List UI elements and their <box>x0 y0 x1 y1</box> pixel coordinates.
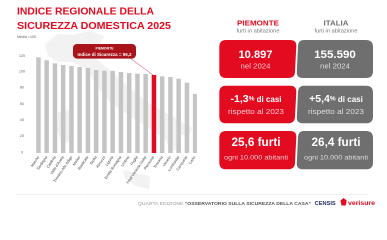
panel: Piemonte variazione: di casi <box>254 95 282 104</box>
callout: Piemonte index: Indice di Sicurezza = 96,2 <box>78 52 132 57</box>
region labels: Friuli Venezia Giulia <box>126 155 148 185</box>
region labels: Basilicata <box>77 155 90 171</box>
panel: Italia variazione: di casi <box>336 95 363 104</box>
panel: Italia furti per abitanti: 26,4 furti <box>312 137 360 149</box>
region labels: Piemonte <box>143 155 155 170</box>
panel: Italia 2024: nel 2024 <box>320 63 350 70</box>
y axis labels <box>19 54 25 154</box>
y axis labels: 120 <box>19 54 25 58</box>
panel: Piemonte furti per abitanti: 25,6 furti <box>232 137 280 149</box>
panel: Piemonte variazione <box>219 86 296 123</box>
region labels: Umbria <box>120 155 131 167</box>
panel: Italia furti per abitanti <box>297 131 373 169</box>
heading: Piemonte: PIEMONTE <box>237 19 279 28</box>
region labels: Campania <box>176 155 189 171</box>
heading: Piemonte <box>236 19 280 34</box>
region labels: Trentino Alto Adige <box>53 155 73 183</box>
y axis labels: 20 <box>20 134 24 138</box>
callout: Piemonte index <box>73 44 153 75</box>
region labels: Sicilia <box>89 155 98 166</box>
panel: Piemonte variazione: -1,3 <box>230 93 249 105</box>
heading: Piemonte: furti in abitazione <box>236 28 280 34</box>
panel: Italia furti per abitanti: ogni 10.000 abitanti <box>304 154 368 162</box>
region labels: Puglia <box>130 155 139 166</box>
panel: Piemonte variazione: rispetto al 2023 <box>228 109 284 116</box>
region labels: Toscana <box>153 155 164 169</box>
logo: Verisure: verisure <box>348 201 376 207</box>
title: INDICE REGIONALE DELLA <box>17 6 154 18</box>
panel: Italia variazione <box>297 86 373 123</box>
region labels: Valle d'Aosta <box>50 155 65 175</box>
panel: Piemonte furti per abitanti: ogni 10.000 abitanti <box>224 154 288 162</box>
panel: Italia variazione: rispetto al 2023 <box>308 109 364 116</box>
heading: Italia: ITALIA <box>324 19 349 28</box>
region labels <box>30 155 196 185</box>
title: SICUREZZA DOMESTICA 2025 <box>17 20 171 32</box>
background map of Italy <box>45 31 192 189</box>
callout: Piemonte index: PIEMONTE <box>96 47 114 51</box>
region labels: Lombardia <box>167 155 181 172</box>
region labels: Emilia Romagna <box>104 155 123 180</box>
region labels: Liguria <box>105 155 115 167</box>
region labels: Lazio <box>188 155 196 165</box>
title <box>17 6 171 32</box>
panel: Piemonte 2024 <box>219 40 296 78</box>
y axis labels: 100 <box>19 70 25 74</box>
Piemonte bar <box>152 75 156 153</box>
panel: Italia 2024: 155.590 <box>314 49 356 61</box>
region labels: Veneto <box>162 155 172 167</box>
logo: Censis: CENSIS <box>315 201 336 207</box>
panel: Italia variazione: % <box>330 95 336 102</box>
axis caption: Media =100 <box>17 35 36 39</box>
footer text: QUARTA EDIZIONE “OSSERVATORIO SULLA SICUREZZA DELLA CASA” <box>138 201 311 206</box>
logo: Verisure <box>340 198 376 207</box>
panel: Piemonte variazione: % <box>249 95 255 102</box>
heading: Italia: furti in abitazione <box>314 28 358 34</box>
heading: Italia <box>314 19 358 34</box>
region labels: Molise <box>72 155 81 166</box>
region labels: Marche <box>30 155 40 168</box>
panel: Italia variazione: +5,4 <box>309 93 330 105</box>
y axis labels: 60 <box>20 102 24 106</box>
panel: Piemonte 2024: nel 2024 <box>240 63 271 70</box>
panel: Piemonte furti per abitanti <box>219 131 296 169</box>
region labels: Calabria <box>46 155 57 169</box>
panel: Italia 2024 <box>297 40 373 78</box>
region labels: Sardegna <box>36 155 49 171</box>
y axis labels: 40 <box>20 118 24 122</box>
panel: Piemonte 2024: 10.897 <box>238 49 272 61</box>
region labels: Abruzzo <box>95 155 106 169</box>
bar chart <box>36 57 197 153</box>
y axis labels: 0 <box>21 150 23 154</box>
y axis labels: 80 <box>20 86 24 90</box>
